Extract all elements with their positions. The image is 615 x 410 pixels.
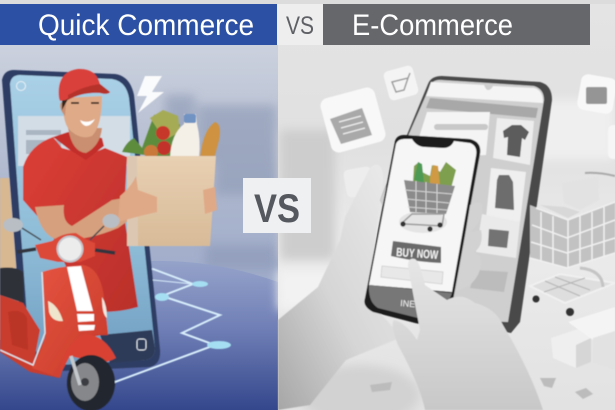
small cart with groceries (399, 162, 456, 233)
panel: quick commerce background (0, 0, 278, 410)
panel: e-commerce background (278, 0, 615, 410)
grocery bag (118, 110, 220, 246)
parcels (0, 178, 16, 268)
tapping hand (393, 259, 543, 410)
buy now button: BUY NOW (396, 245, 439, 262)
heading: Quick Commerce: Quick Commerce (38, 9, 254, 42)
small shopping phone (364, 135, 480, 324)
heading: Quick Commerce (0, 4, 277, 45)
top strip (0, 0, 615, 4)
heading: VS tab (277, 4, 323, 45)
heading: E-Commerce: E-Commerce (352, 9, 513, 42)
scooter (0, 214, 120, 410)
buy now button (391, 241, 441, 263)
heading: E-Commerce (323, 4, 590, 45)
route line (115, 269, 231, 382)
small shopping phone: INEW (400, 298, 425, 310)
large shopping phone (380, 76, 552, 333)
center VS badge (243, 178, 311, 233)
icon tiles (319, 65, 615, 198)
shopping cart (530, 173, 615, 316)
left hand (278, 164, 402, 410)
center VS badge: VS (254, 187, 300, 231)
holding fingers (456, 202, 482, 292)
heading: VS tab: VS (286, 12, 314, 40)
icon: lightning bolt (137, 76, 164, 113)
cardboard boxes (370, 307, 615, 399)
delivery phone (2, 70, 160, 372)
delivery man (23, 69, 138, 312)
